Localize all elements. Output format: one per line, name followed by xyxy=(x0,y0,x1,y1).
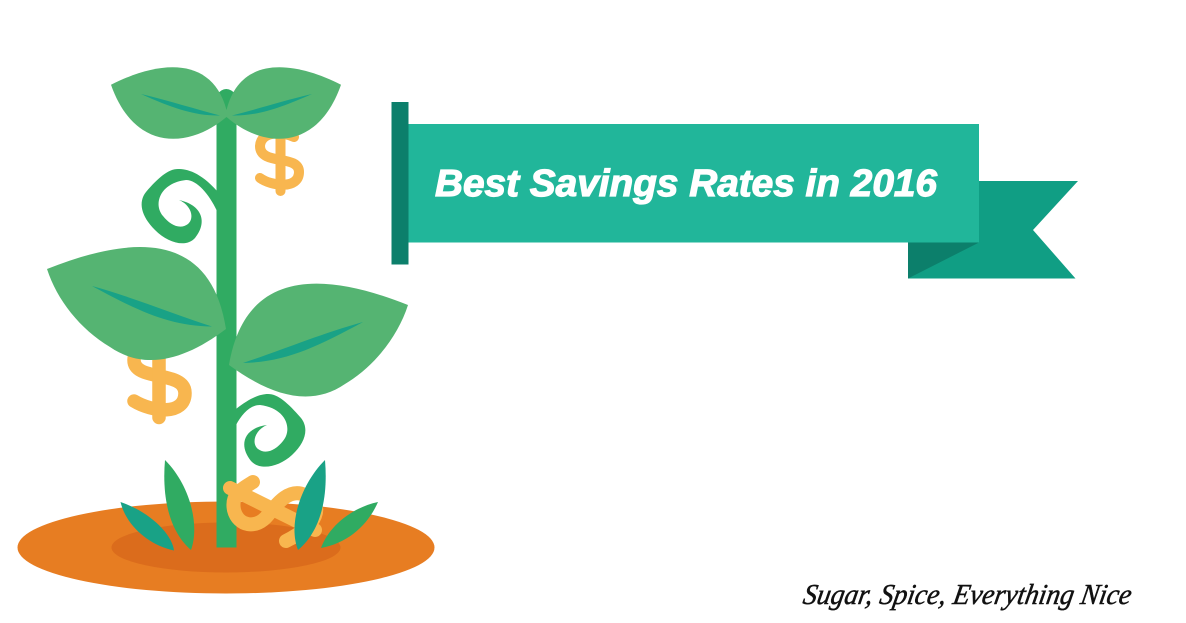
ribbon tail xyxy=(908,181,1078,278)
leaf: big right xyxy=(229,284,408,396)
small leaf: green right xyxy=(321,502,378,548)
tendril lower xyxy=(236,394,305,467)
small leaf: teal left xyxy=(120,502,174,550)
ground mound xyxy=(18,502,434,594)
ribbon fold xyxy=(908,242,979,278)
brand tagline: Sugar, Spice, Everything Nice xyxy=(801,579,1134,611)
leaf: top right xyxy=(226,67,341,139)
icon: dollar sign top xyxy=(260,128,299,191)
ribbon pole xyxy=(392,102,408,264)
ribbon band xyxy=(408,124,979,242)
leaf vein xyxy=(232,94,312,116)
small leaf: teal right xyxy=(294,460,326,550)
plant stem xyxy=(216,89,236,548)
leaf vein xyxy=(92,286,212,326)
small leaf: green left xyxy=(164,460,194,550)
leaf vein xyxy=(141,94,220,116)
leaf vein xyxy=(243,322,363,363)
tendril upper xyxy=(142,169,217,243)
title: Best Savings Rates in 2016 xyxy=(435,163,938,205)
icon: dollar sign lying on the ground xyxy=(230,482,316,541)
leaf: big left xyxy=(47,247,226,360)
icon: dollar sign left xyxy=(134,345,185,418)
leaf: top left xyxy=(111,67,226,139)
